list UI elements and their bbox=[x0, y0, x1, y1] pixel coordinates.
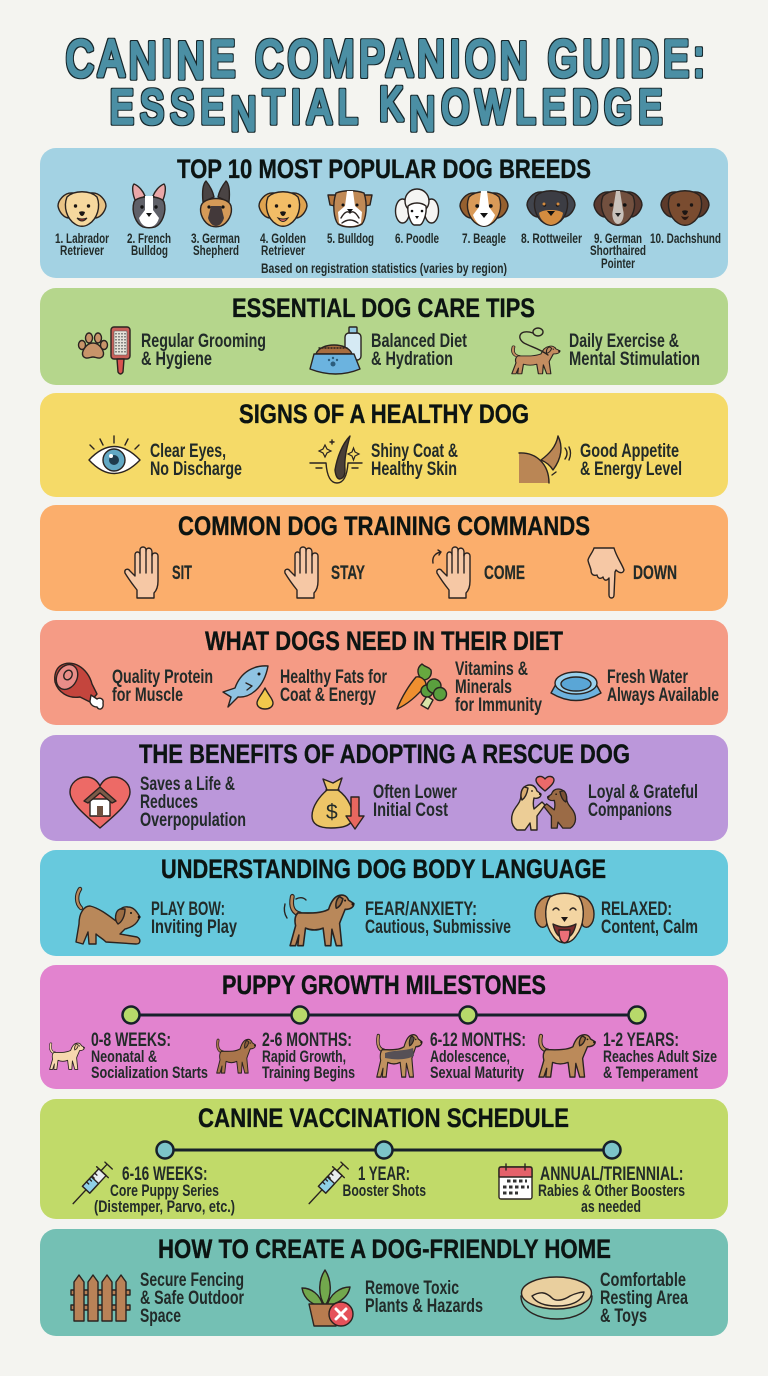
icon: fish and oil drop bbox=[223, 666, 273, 709]
text: breed 3 bbox=[191, 231, 240, 258]
text: annual: as needed bbox=[581, 1198, 641, 1216]
text: diet bbox=[371, 331, 468, 370]
text: fats: Healthy Fats for bbox=[280, 667, 387, 688]
icon: meat bbox=[52, 661, 103, 709]
heading: puppy: PUPPY GROWTH MILESTONES bbox=[222, 970, 546, 1000]
panel: body language bbox=[40, 850, 728, 956]
text: saves a life: Reduces bbox=[140, 792, 198, 813]
timeline: puppy bbox=[122, 1006, 646, 1024]
text: appetite: Good Appetite bbox=[580, 441, 679, 462]
panel: top 10 breeds bbox=[40, 148, 728, 278]
icon: syringe bbox=[303, 1160, 350, 1209]
text: breed 6: 6. Poodle bbox=[395, 231, 439, 246]
icon: golden retriever bbox=[259, 192, 307, 226]
text: 0-8 weeks: Socialization Starts bbox=[91, 1064, 208, 1082]
icon: fearful dog bbox=[284, 895, 354, 946]
heading: vaccination: CANINE VACCINATION SCHEDULE bbox=[198, 1103, 569, 1133]
icon: dog bed bbox=[521, 1277, 592, 1319]
icon: water bowl bbox=[551, 672, 601, 700]
text: breed 10: 10. Dachshund bbox=[650, 231, 721, 246]
text: breed 8: 8. Rottweiler bbox=[521, 231, 583, 246]
text: 2-6 months: Training Begins bbox=[262, 1064, 355, 1082]
text: coat bbox=[371, 441, 458, 480]
icon: french bulldog bbox=[133, 184, 165, 228]
panel: dog care tips bbox=[40, 288, 728, 385]
text: relaxed: Content, Calm bbox=[601, 917, 698, 938]
icon: carrot and broccoli bbox=[397, 664, 446, 709]
icon: hand down bbox=[588, 548, 624, 598]
text: stay: STAY bbox=[331, 563, 365, 584]
text: 6-12 months bbox=[430, 1030, 526, 1082]
text: play bow: Inviting Play bbox=[151, 917, 237, 938]
text: water: Always Available bbox=[607, 685, 719, 706]
text: breed 9: Shorthaired bbox=[590, 243, 646, 258]
icon: money bag and arrow bbox=[312, 778, 364, 829]
text: breed 7: 7. Beagle bbox=[462, 231, 506, 246]
text: protein: Quality Protein bbox=[112, 667, 213, 688]
text: breed 4 bbox=[260, 231, 306, 258]
panel: vaccination schedule bbox=[40, 1099, 728, 1219]
text: saves a life: Overpopulation bbox=[140, 810, 246, 831]
icon: money bag and arrow: $ bbox=[326, 801, 338, 824]
text: breed 2 bbox=[127, 231, 171, 258]
icon: play bow dog bbox=[76, 889, 140, 944]
text: plants: Plants & Hazards bbox=[365, 1296, 483, 1317]
text: 2-6 months bbox=[262, 1030, 355, 1082]
text: cost: Initial Cost bbox=[373, 800, 449, 821]
heading: care tips: ESSENTIAL DOG CARE TIPS bbox=[232, 293, 535, 323]
icon: german shepherd bbox=[201, 181, 231, 227]
text: fencing bbox=[140, 1270, 244, 1327]
text: 2-6 months: 2-6 MONTHS: bbox=[262, 1030, 352, 1051]
heading: training: COMMON DOG TRAINING COMMANDS bbox=[178, 511, 590, 541]
text: 1-2 years bbox=[603, 1030, 717, 1082]
panel: training commands bbox=[40, 505, 728, 611]
text: 1-2 years: & Temperament bbox=[603, 1064, 698, 1082]
text: 1-2 years: Reaches Adult Size bbox=[603, 1048, 717, 1066]
panel: signs of a healthy dog bbox=[40, 393, 728, 497]
text: breed 4: 4. Golden bbox=[260, 231, 306, 246]
text: grooming: & Hygiene bbox=[141, 349, 212, 370]
text: plants bbox=[365, 1278, 483, 1317]
text: coat: Shiny Coat & bbox=[371, 441, 458, 462]
text: 1-2 years: 1-2 YEARS: bbox=[603, 1030, 679, 1051]
timeline: vaccination bbox=[156, 1142, 620, 1158]
text: 6-16 weeks bbox=[94, 1164, 235, 1216]
text: breed 3: Shepherd bbox=[193, 243, 239, 258]
text: 2-6 months: Rapid Growth, bbox=[262, 1048, 346, 1066]
text: protein bbox=[112, 667, 213, 706]
heading: top 10 breeds: TOP 10 MOST POPULAR DOG BREEDS bbox=[177, 154, 591, 184]
icon: adult dog bbox=[539, 1035, 595, 1077]
icon: hand come bbox=[433, 547, 470, 598]
text: 6-12 months: Adolescence, bbox=[430, 1048, 510, 1066]
text: appetite bbox=[580, 441, 682, 480]
text: water bbox=[607, 667, 719, 706]
text: diet: & Hydration bbox=[371, 349, 453, 370]
text: breed 2: 2. French bbox=[127, 231, 171, 246]
icon: plant with x bbox=[302, 1270, 353, 1326]
text: 6-16 weeks: 6-16 WEEKS: bbox=[122, 1164, 208, 1185]
text: breed 2: Bulldog bbox=[131, 243, 168, 258]
text: breed 1 bbox=[55, 231, 110, 258]
footnote: Based on registration statistics (varies by region) bbox=[261, 261, 507, 276]
icon: rottweiler bbox=[527, 191, 575, 225]
text: breed 9: Pointer bbox=[601, 256, 636, 271]
text: plants: Remove Toxic bbox=[365, 1278, 459, 1299]
icon: beagle bbox=[460, 191, 508, 226]
panel: adopting a rescue dog bbox=[40, 735, 728, 841]
icon: german shorthaired pointer bbox=[594, 191, 642, 225]
text: companions bbox=[588, 782, 698, 821]
text: 0-8 weeks: Neonatal & bbox=[91, 1048, 157, 1066]
icon: newborn puppy bbox=[50, 1043, 85, 1069]
text: exercise: Mental Stimulation bbox=[569, 349, 700, 370]
text: 6-16 weeks: (Distemper, Parvo, etc.) bbox=[94, 1198, 235, 1216]
text: 0-8 weeks: 0-8 WEEKS: bbox=[91, 1030, 171, 1051]
text: annual: ANNUAL/TRIENNIAL: bbox=[540, 1164, 684, 1185]
text: 1 year bbox=[342, 1164, 426, 1200]
text: 0-8 weeks bbox=[91, 1030, 208, 1082]
icon: young puppy bbox=[217, 1039, 256, 1073]
text: breed 9: 9. German bbox=[594, 231, 642, 246]
text: diet: Balanced Diet bbox=[371, 331, 468, 352]
heading: diet: WHAT DOGS NEED IN THEIR DIET bbox=[205, 626, 563, 656]
text: breed 9 bbox=[590, 231, 646, 271]
icon: bulldog bbox=[328, 191, 372, 227]
text: fencing: Space bbox=[140, 1306, 181, 1327]
icon: relaxed dog face bbox=[535, 893, 594, 943]
icon: syringe bbox=[67, 1160, 114, 1209]
text: grooming bbox=[141, 331, 266, 370]
title: ESSENTIAL KNOWLEDGE bbox=[110, 77, 662, 140]
text: saves a life: Saves a Life & bbox=[140, 774, 235, 795]
heading: body language: UNDERSTANDING DOG BODY LANGUAGE bbox=[161, 854, 606, 884]
text: fear: FEAR/ANXIETY: bbox=[365, 899, 477, 920]
icon: shiny hair follicle bbox=[310, 436, 362, 483]
text: come: COME bbox=[484, 563, 525, 584]
text: vitamins bbox=[455, 659, 542, 716]
text: fear bbox=[365, 899, 511, 938]
title: CANINE COMPANION GUIDE: bbox=[66, 30, 704, 89]
icon: wagging tail bbox=[519, 436, 570, 483]
text: eyes bbox=[150, 441, 242, 480]
text: eyes: Clear Eyes, bbox=[150, 441, 226, 462]
text: vitamins: for Immunity bbox=[455, 695, 542, 716]
text: exercise: Daily Exercise & bbox=[569, 331, 679, 352]
text: breed 1: Retriever bbox=[60, 243, 105, 258]
text: resting area bbox=[600, 1270, 688, 1327]
icon: labrador bbox=[58, 192, 106, 226]
icon: food bowl and bottle bbox=[310, 327, 361, 374]
text: cost: Often Lower bbox=[373, 782, 457, 803]
text: breed 1: 1. Labrador bbox=[55, 231, 110, 246]
text: protein: for Muscle bbox=[112, 685, 183, 706]
icon: heart with house bbox=[70, 777, 130, 828]
text: saves a life bbox=[140, 774, 246, 831]
icon: adolescent dog bbox=[377, 1035, 422, 1077]
icon: hand stay bbox=[285, 547, 318, 598]
panel: diet bbox=[40, 620, 728, 725]
icon: clear eye bbox=[89, 436, 140, 474]
text: fats: Coat & Energy bbox=[280, 685, 376, 706]
text: resting area: Comfortable bbox=[600, 1270, 686, 1291]
text: down: DOWN bbox=[633, 563, 677, 584]
text: fencing: & Safe Outdoor bbox=[140, 1288, 244, 1309]
icon: two dogs and heart bbox=[512, 776, 576, 830]
heading: healthy dog: SIGNS OF A HEALTHY DOG bbox=[239, 399, 529, 429]
icon: dog on leash bbox=[512, 328, 560, 374]
text: 1 year: 1 YEAR: bbox=[358, 1164, 410, 1185]
text: annual: Rabies & Other Boosters bbox=[538, 1182, 685, 1200]
text: resting area: Resting Area bbox=[600, 1288, 688, 1309]
text: companions: Loyal & Grateful bbox=[588, 782, 698, 803]
text: vitamins: Vitamins & bbox=[455, 659, 528, 680]
text: exercise bbox=[569, 331, 700, 370]
text: fear: Cautious, Submissive bbox=[365, 917, 511, 938]
icon: hand sit bbox=[125, 547, 158, 598]
title bbox=[66, 30, 704, 140]
text: cost bbox=[373, 782, 457, 821]
text: 6-12 months: 6-12 MONTHS: bbox=[430, 1030, 526, 1051]
text: sit: SIT bbox=[172, 563, 192, 584]
heading: rescue: THE BENEFITS OF ADOPTING A RESCUE DOG bbox=[139, 739, 630, 769]
text: 1 year: Booster Shots bbox=[342, 1182, 426, 1200]
text: 6-12 months: Sexual Maturity bbox=[430, 1064, 525, 1082]
icon: poodle bbox=[396, 189, 438, 225]
text: annual bbox=[538, 1164, 685, 1216]
text: play bow: PLAY BOW: bbox=[151, 899, 225, 920]
text: play bow bbox=[151, 899, 237, 938]
text: breed 5: 5. Bulldog bbox=[327, 231, 374, 246]
text: water: Fresh Water bbox=[607, 667, 688, 688]
text: resting area: & Toys bbox=[600, 1306, 647, 1327]
panel: dog-friendly home bbox=[40, 1229, 728, 1336]
text: breed 4: Retriever bbox=[261, 243, 306, 258]
text: relaxed bbox=[601, 899, 698, 938]
icon: calendar bbox=[499, 1164, 532, 1199]
text: relaxed: RELAXED: bbox=[601, 899, 672, 920]
icon: fence bbox=[71, 1275, 130, 1321]
text: fats bbox=[280, 667, 387, 706]
text: 6-16 weeks: Core Puppy Series bbox=[110, 1182, 219, 1200]
panel: puppy milestones bbox=[40, 965, 728, 1089]
text: coat: Healthy Skin bbox=[371, 459, 457, 480]
text: eyes: No Discharge bbox=[150, 459, 242, 480]
heading: home: HOW TO CREATE A DOG-FRIENDLY HOME bbox=[158, 1234, 611, 1264]
icon: dachshund bbox=[661, 191, 709, 225]
text: grooming: Regular Grooming bbox=[141, 331, 266, 352]
text: appetite: & Energy Level bbox=[580, 459, 682, 480]
text: companions: Companions bbox=[588, 800, 672, 821]
text: breed 3: 3. German bbox=[191, 231, 240, 246]
text: fencing: Secure Fencing bbox=[140, 1270, 244, 1291]
text: vitamins: Minerals bbox=[455, 677, 512, 698]
icon: paw and brush bbox=[78, 327, 130, 374]
